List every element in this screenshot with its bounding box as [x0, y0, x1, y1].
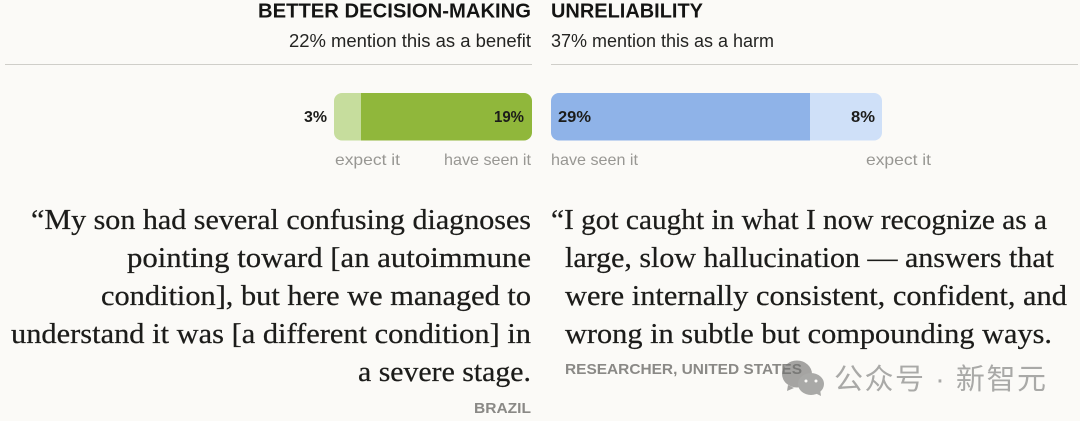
attribution: researcher: RESEARCHER, UNITED STATES [565, 361, 802, 378]
quote: Brazil: pointing toward [an autoimmune [127, 242, 531, 274]
quote: researcher: wrong in subtle but compounding ways. [565, 318, 1052, 350]
quote: researcher: were internally consistent, confident, and [565, 280, 1068, 312]
quote: Brazil: a severe stage. [358, 356, 531, 388]
subheading: harm share: 37% mention this as a harm [551, 31, 774, 51]
bar chart: benefit: 19% [494, 109, 524, 126]
bar chart: benefit: 3% [304, 109, 327, 126]
bar chart: harm: 8% [851, 109, 875, 126]
bar chart: harm: 29% [558, 109, 591, 126]
bar chart: harm [551, 93, 932, 169]
bar chart: harm: have seen it [551, 152, 639, 169]
quote: Brazil: understand it was [a different condition] in [11, 318, 532, 350]
quote: researcher [551, 204, 1068, 350]
watermark text: 公众号 · 新智元 [834, 363, 1046, 396]
heading: unreliability: UNRELIABILITY [551, 0, 703, 22]
panel: better decision-making benefit [5, 0, 532, 417]
quote: Brazil: condition], but here we managed to [101, 280, 531, 312]
attribution: Brazil: BRAZIL [474, 400, 531, 417]
panel: unreliability harm [551, 0, 1078, 378]
bar chart: benefit: expect it [335, 152, 401, 169]
bar chart: benefit: have seen it [444, 152, 532, 169]
bar chart: harm: expect it [866, 152, 932, 169]
bar chart: benefit [304, 93, 532, 169]
quote: researcher: “I got caught in what I now recognize as a [551, 204, 1047, 236]
subheading: benefit share: 22% mention this as a benefit [289, 31, 531, 51]
quote: Brazil: “My son had several confusing diagnoses [31, 204, 531, 236]
heading: better decision-making: BETTER DECISION-MAKING [258, 0, 531, 22]
icon: wechat watermark [782, 360, 824, 396]
quote: Brazil [11, 204, 532, 388]
quote: researcher: large, slow hallucination — answers that [565, 242, 1054, 274]
